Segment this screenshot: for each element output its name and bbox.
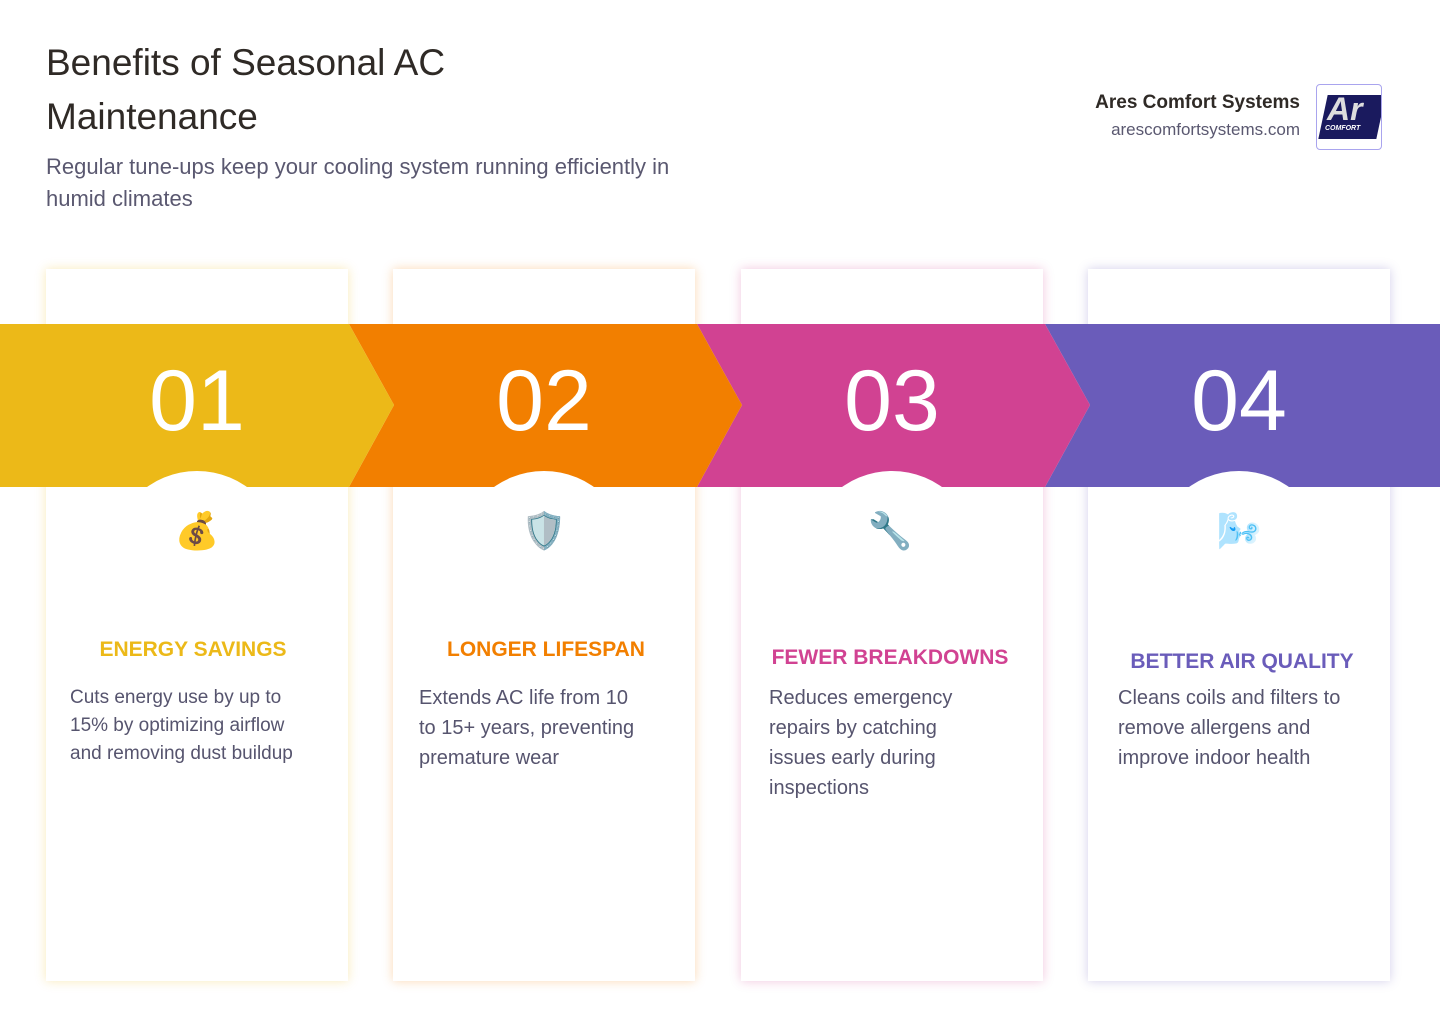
brand name: Ares Comfort Systems <box>1095 92 1300 113</box>
number 03: 03 <box>844 353 940 449</box>
number 04: 04 <box>1191 353 1287 449</box>
brand block <box>1095 84 1382 150</box>
number 01: 01 <box>149 353 245 449</box>
title <box>46 42 445 137</box>
logo <box>1316 84 1382 150</box>
heading 2: LONGER LIFESPAN <box>447 638 645 661</box>
icon: shield: 🛡️ <box>522 510 566 552</box>
logo: COMFORT <box>1325 125 1360 132</box>
icon: wind: 🌬️ <box>1217 510 1261 552</box>
card 4 <box>1088 269 1390 981</box>
brand url: arescomfortsystems.com <box>1111 120 1300 139</box>
title: Benefits of Seasonal AC <box>46 42 445 83</box>
arrow band <box>0 324 1440 487</box>
title: Maintenance <box>46 96 258 137</box>
text 4: Cleans coils and filters to remove allergens and improve indoor health <box>1118 687 1340 769</box>
text 3: Reduces emergency repairs by catching issues early during inspections <box>769 687 952 799</box>
icon: money bag: 💰 <box>175 510 219 552</box>
logo: Ar <box>1327 91 1363 127</box>
number 02: 02 <box>496 353 592 449</box>
heading 1: ENERGY SAVINGS <box>99 638 287 661</box>
heading 4: BETTER AIR QUALITY <box>1130 650 1354 673</box>
icon: wrench: 🔧 <box>868 510 912 552</box>
text 1: Cuts energy use by up to 15% by optimizing airflow and removing dust buildup <box>70 687 293 764</box>
card 1 <box>46 269 348 981</box>
card 3 <box>741 269 1043 981</box>
card 2 <box>393 269 695 981</box>
subtitle: Regular tune-ups keep your cooling system running efficiently in humid climates <box>46 154 669 211</box>
heading 3: FEWER BREAKDOWNS <box>772 646 1008 669</box>
text 2: Extends AC life from 10 to 15+ years, preventing premature wear <box>419 687 634 769</box>
